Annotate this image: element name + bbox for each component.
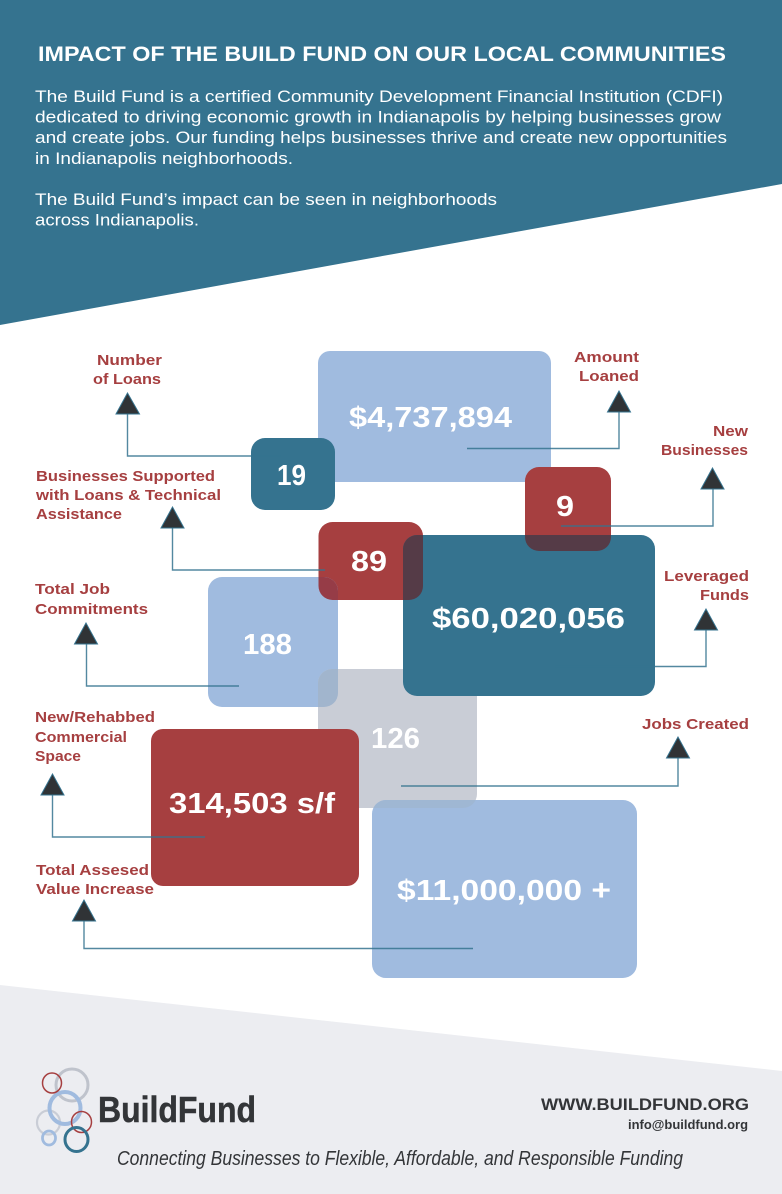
intro text: and create jobs. Our funding helps businesses thrive and create new opportunities bbox=[35, 128, 727, 147]
label: new businesses bbox=[661, 423, 748, 459]
intro text: dedicated to driving economic growth in Indianapolis by helping businesses grow bbox=[35, 108, 722, 126]
intro text: The Build Fund is a certified Community Development Financial Institution (CDFI) bbox=[35, 87, 723, 106]
logo wordmark: BuildFund bbox=[98, 1089, 256, 1130]
title: IMPACT OF THE BUILD FUND ON OUR LOCAL COMMUNITIES bbox=[38, 43, 726, 66]
label: number of loans: of Loans bbox=[93, 371, 161, 388]
value: jobs created: 126 bbox=[371, 723, 420, 755]
label: new businesses: Businesses bbox=[661, 442, 748, 459]
overlap: leveraged funds and businesses supported bbox=[403, 535, 423, 600]
value: assessed value: $11,000,000 + bbox=[397, 875, 611, 907]
label: assessed value: Value Increase bbox=[36, 881, 154, 898]
label: commercial space: Commercial bbox=[35, 729, 127, 746]
header panel bbox=[0, 0, 782, 325]
label: businesses supported: with Loans & Technical bbox=[35, 487, 221, 504]
connector: assessed value bbox=[72, 900, 473, 948]
label: assessed value bbox=[36, 862, 154, 898]
box: total job commitments bbox=[208, 577, 338, 707]
label: leveraged funds bbox=[664, 568, 749, 604]
box: amount loaned bbox=[318, 351, 551, 482]
footer panel bbox=[0, 985, 782, 1194]
label: businesses supported: Assistance bbox=[36, 506, 122, 523]
connector: number of loans bbox=[116, 393, 281, 456]
connector: total job commitments bbox=[74, 623, 239, 686]
tagline: Connecting Businesses to Flexible, Affordable, and Responsible Funding bbox=[117, 1148, 683, 1170]
icon: BuildFund logo circles bbox=[37, 1069, 92, 1152]
label: amount loaned bbox=[574, 349, 639, 385]
box: businesses supported bbox=[318, 522, 423, 600]
website: WWW.BUILDFUND.ORG bbox=[541, 1095, 749, 1114]
label: amount loaned: Amount bbox=[574, 349, 639, 366]
overlap: job commitments and businesses supported bbox=[318, 577, 338, 600]
value: leveraged funds: $60,020,056 bbox=[432, 603, 625, 635]
label: leveraged funds: Leveraged bbox=[664, 568, 749, 585]
box: total assessed value bbox=[372, 800, 637, 978]
box: number of loans bbox=[251, 438, 335, 510]
label: businesses supported: Businesses Supported bbox=[36, 468, 215, 485]
intro text bbox=[35, 87, 727, 230]
email: info@buildfund.org bbox=[628, 1118, 748, 1132]
value: amount loaned: $4,737,894 bbox=[349, 402, 512, 434]
value: number of loans: 19 bbox=[277, 460, 306, 492]
box: commercial space bbox=[151, 729, 359, 886]
connector: commercial space bbox=[41, 774, 205, 837]
label: total job commitments: Total Job bbox=[35, 581, 110, 598]
label: number of loans bbox=[93, 352, 162, 388]
connector: jobs created bbox=[401, 737, 690, 786]
box: leveraged funds bbox=[403, 535, 655, 696]
label: commercial space bbox=[35, 709, 155, 765]
label: leveraged funds: Funds bbox=[700, 587, 749, 604]
connector: amount loaned bbox=[467, 391, 630, 448]
intro text: in Indianapolis neighborhoods. bbox=[35, 149, 293, 168]
label: jobs created: Jobs Created bbox=[642, 716, 749, 733]
label: commercial space: New/Rehabbed bbox=[35, 709, 155, 726]
intro text: across Indianapolis. bbox=[35, 210, 199, 230]
overlap: job commitments and jobs created bbox=[318, 669, 338, 707]
label: total job commitments: Commitments bbox=[35, 601, 148, 618]
label: commercial space: Space bbox=[35, 748, 81, 765]
box: new businesses bbox=[525, 467, 611, 551]
overlap: jobs created and assessed value bbox=[374, 800, 476, 808]
overlap: leveraged funds and new businesses bbox=[525, 535, 611, 551]
value: commercial space: 314,503 s/f bbox=[169, 788, 335, 820]
connector: businesses supported bbox=[161, 507, 325, 570]
value: businesses supported: 89 bbox=[351, 546, 387, 578]
connector: leveraged funds bbox=[555, 609, 718, 666]
label: number of loans: Number bbox=[97, 352, 162, 369]
label: total job commitments bbox=[35, 581, 148, 618]
label: new businesses: New bbox=[713, 423, 748, 440]
label: businesses supported bbox=[35, 468, 221, 523]
value: total job commitments: 188 bbox=[243, 629, 292, 661]
label: amount loaned: Loaned bbox=[579, 368, 639, 385]
value: new businesses: 9 bbox=[556, 491, 574, 523]
label: assessed value: Total Assesed bbox=[36, 862, 149, 879]
intro text: The Build Fund’s impact can be seen in neighborhoods bbox=[35, 190, 497, 209]
box: jobs created bbox=[318, 669, 477, 808]
connector: new businesses bbox=[561, 468, 724, 526]
